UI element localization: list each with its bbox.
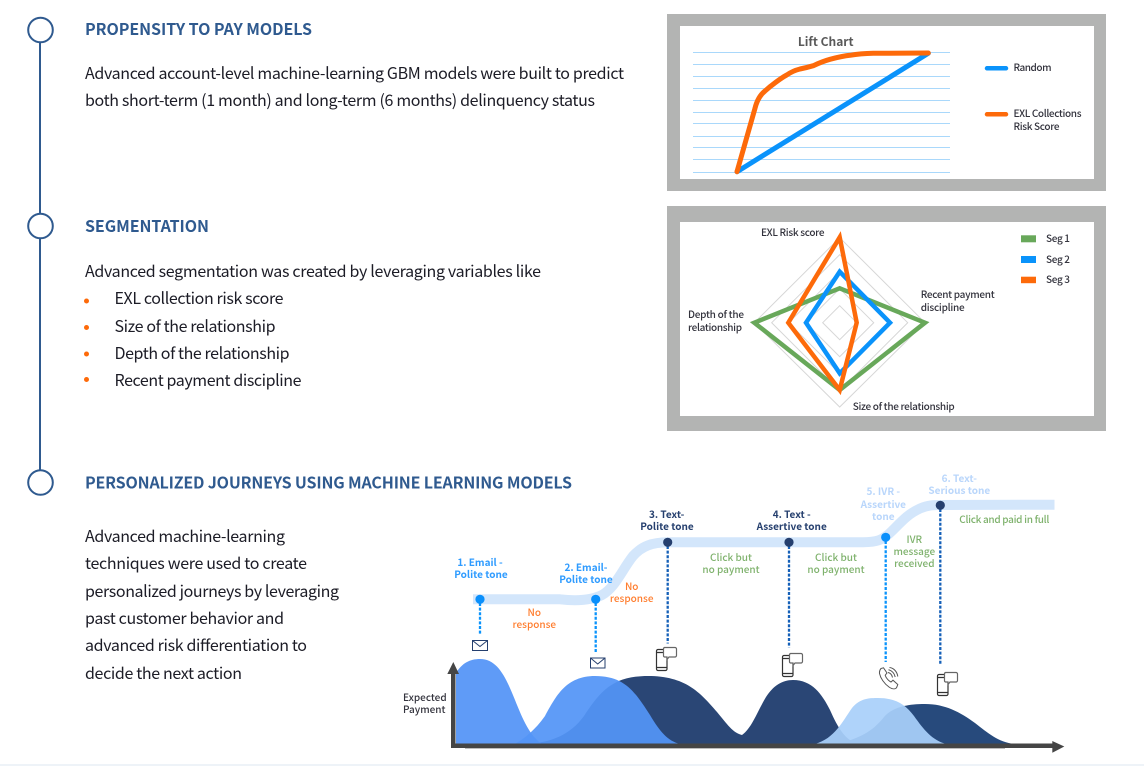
legend: Seg 1 xyxy=(1046,230,1070,245)
hump: text polite and assertive xyxy=(528,676,858,744)
step 6 label: 6. Text- xyxy=(942,470,977,485)
step 1 label: Polite tone xyxy=(454,566,508,581)
step 4 label: 4. Text - xyxy=(773,506,811,521)
icon: phone with message 1 xyxy=(656,648,676,670)
axes xyxy=(447,662,1064,753)
axis labels xyxy=(688,224,995,413)
axis label: expected payment: Expected xyxy=(403,689,447,704)
axis label: expected payment: Payment xyxy=(403,701,446,716)
outcome: click but no payment 2: no payment xyxy=(807,561,865,576)
hump: text serious xyxy=(837,704,1014,744)
legend xyxy=(987,59,1082,133)
icon: phone with message 2 xyxy=(782,654,802,676)
outcome: click but no payment 2: Click but xyxy=(815,549,857,564)
section: personalized journeys xyxy=(85,470,572,684)
bullet list xyxy=(84,285,302,391)
dotted connectors xyxy=(480,509,940,664)
outcome: IVR message received: received xyxy=(894,555,935,570)
legend: Risk Score xyxy=(1014,118,1060,133)
axis labels: discipline xyxy=(921,299,965,314)
body text: Advanced machine-learning xyxy=(85,523,285,547)
body text xyxy=(85,523,339,684)
step 2 label: 2. Email- xyxy=(564,559,608,574)
step 6 label: Serious tone xyxy=(928,482,990,497)
panel: radar chart xyxy=(667,206,1106,431)
outcome: no response 1: No xyxy=(528,604,541,619)
legend: Seg 2 xyxy=(1046,251,1070,266)
bullet list: Size of the relationship xyxy=(114,313,276,337)
step 3 label: 3. Text- xyxy=(649,506,685,521)
axis labels: Size of the relationship xyxy=(853,398,955,413)
hump: email 1 xyxy=(456,659,542,744)
outcome: no response 2: No xyxy=(625,578,638,593)
heading: PERSONALIZED JOURNEYS USING MACHINE LEARNING MODELS xyxy=(85,470,572,494)
heading: SEGMENTATION xyxy=(85,213,209,237)
panel: lift chart xyxy=(667,14,1106,191)
legend xyxy=(1021,230,1070,286)
legend: EXL Collections xyxy=(1014,105,1082,120)
body text: both short-term (1 month) and long-term (6 months) delinquency status xyxy=(85,87,595,111)
hump: email 2 xyxy=(515,676,680,744)
icon: email 1 xyxy=(472,640,488,650)
section: segmentation xyxy=(84,213,541,391)
outcome: click but no payment 1: no payment xyxy=(702,561,760,576)
journey path band xyxy=(473,505,1054,600)
body text: techniques were used to create xyxy=(85,550,307,574)
chart title: Lift Chart xyxy=(798,33,854,50)
journey nodes xyxy=(475,501,945,604)
bullet list: Recent payment discipline xyxy=(114,367,302,391)
outcome: no response 2: response xyxy=(610,590,654,605)
icon: phone call xyxy=(879,668,898,689)
bullet list: EXL collection risk score xyxy=(114,285,284,309)
axis labels: Depth of the xyxy=(688,306,744,321)
body text: advanced risk differentiation to xyxy=(85,632,307,656)
bullet list: Depth of the relationship xyxy=(114,340,290,364)
legend: Seg 3 xyxy=(1046,271,1070,286)
axis labels: relationship xyxy=(688,319,742,334)
line: random xyxy=(737,53,928,172)
axis labels: Recent payment xyxy=(921,286,995,301)
body text: Advanced account-level machine-learning GBM models were built to predict xyxy=(85,60,624,84)
step 2 label: Polite tone xyxy=(559,571,613,586)
series: seg 3 xyxy=(788,237,857,390)
step 3 label: Polite tone xyxy=(640,518,694,533)
series: seg 2 xyxy=(806,272,890,373)
step 5 label: Assertive xyxy=(860,496,906,511)
body text: Advanced segmentation was created by leveraging variables like xyxy=(85,258,541,282)
series: seg 1 xyxy=(754,288,925,390)
legend: Random xyxy=(1014,59,1052,74)
step 5 label: tone xyxy=(872,508,895,523)
axis labels: EXL Risk score xyxy=(761,224,825,239)
body text: personalized journeys by leveraging xyxy=(85,578,339,602)
outcome: IVR message received: IVR xyxy=(907,531,923,546)
outcome: no response 1: response xyxy=(513,616,556,631)
step 4 label: Assertive tone xyxy=(756,518,827,533)
outcome: click and paid in full: Click and paid in full xyxy=(959,511,1049,526)
icon: phone with message 3 xyxy=(938,672,958,696)
icon: email 2 xyxy=(590,658,605,668)
body text: past customer behavior and xyxy=(85,605,284,629)
area chart: expected payment humps xyxy=(456,659,1014,744)
heading: PROPENSITY TO PAY MODELS xyxy=(85,16,312,40)
outcome: click but no payment 1: Click but xyxy=(710,549,752,564)
body text xyxy=(85,60,624,111)
timeline xyxy=(28,18,53,495)
section: propensity to pay models xyxy=(85,16,624,111)
hump: IVR xyxy=(815,698,946,744)
body text: decide the next action xyxy=(85,660,242,684)
step 1 label: 1. Email - xyxy=(457,554,503,569)
step 5 label: 5. IVR - xyxy=(866,483,900,498)
outcome: IVR message received: message xyxy=(893,543,935,558)
line: EXL collections risk score xyxy=(737,53,928,172)
